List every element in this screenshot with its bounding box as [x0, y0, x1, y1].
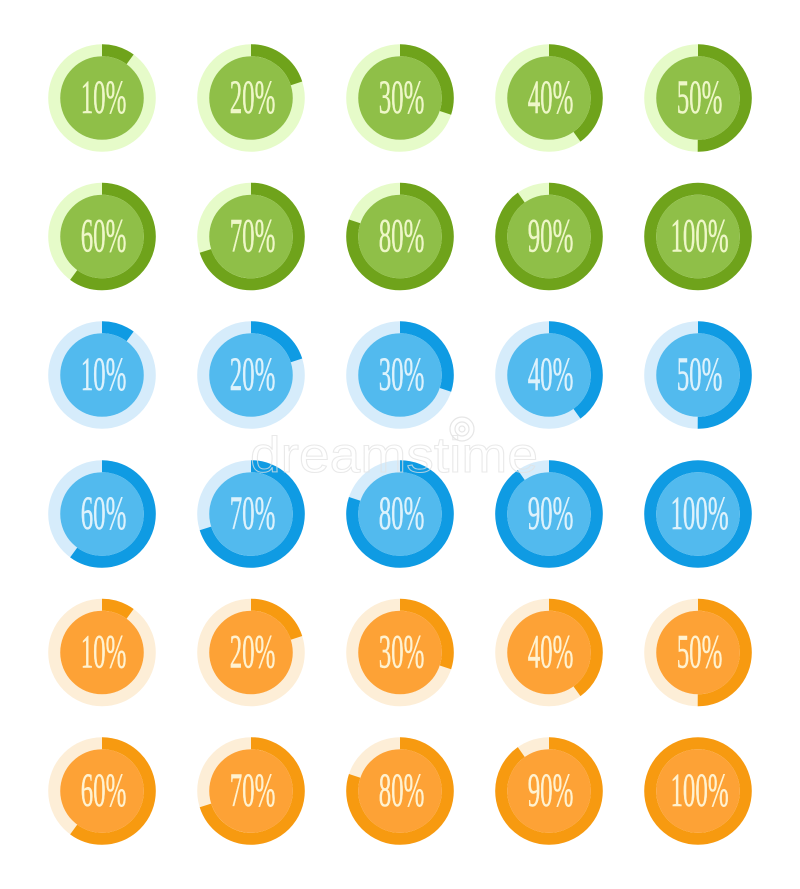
gauge: orange 30%: 30% — [379, 626, 424, 679]
gauge: orange 80%: 80% — [379, 765, 424, 817]
gauge: blue 80%: 80% — [379, 488, 424, 540]
gauge: blue 70%: 70% — [230, 488, 275, 540]
gauge: green 70% — [203, 189, 299, 284]
gauge: orange 10% — [54, 605, 150, 700]
gauge: orange 90% — [501, 743, 597, 839]
gauge: blue 40%: 40% — [528, 349, 573, 401]
gauge: orange 100% — [650, 743, 746, 839]
gauge: orange 70%: 70% — [230, 765, 275, 817]
gauge: green 20%: 20% — [230, 72, 275, 124]
gauge: green 90%: 90% — [528, 210, 573, 263]
gauge: green 60% — [54, 189, 150, 284]
gauge: orange 60%: 60% — [81, 765, 126, 817]
gauge: green 80% — [352, 189, 448, 284]
gauge: orange 20%: 20% — [230, 626, 275, 679]
gauge: blue 80% — [352, 466, 448, 562]
gauge: orange 80% — [352, 743, 448, 839]
gauge: orange 40%: 40% — [528, 626, 573, 679]
gauge: green 60%: 60% — [81, 210, 126, 263]
gauge: green 30% — [352, 50, 448, 146]
gauge: green 50% — [650, 50, 746, 146]
gauge: orange 10%: 10% — [81, 626, 126, 679]
gauge: green 30%: 30% — [379, 72, 424, 124]
gauge: blue 30%: 30% — [379, 349, 424, 401]
gauge: blue 40% — [501, 327, 597, 423]
gauge: blue 10%: 10% — [81, 349, 126, 401]
gauge: orange 70% — [203, 743, 299, 839]
gauge: orange 90%: 90% — [528, 765, 573, 817]
gauge: orange 50% — [650, 605, 746, 700]
gauge: blue 100% — [650, 466, 746, 562]
gauge: green 90% — [501, 189, 597, 284]
gauge: green 100%: 100% — [670, 210, 729, 263]
gauge: orange 100%: 100% — [670, 765, 729, 817]
gauge: blue 90%: 90% — [528, 488, 573, 540]
gauge: blue 90% — [501, 466, 597, 562]
gauge: orange 20% — [203, 605, 299, 700]
gauge: blue 70% — [203, 466, 299, 562]
gauge: blue 50%: 50% — [677, 349, 722, 401]
gauge: green 40%: 40% — [528, 72, 573, 124]
gauge: green 20% — [203, 50, 299, 146]
gauge: green 80%: 80% — [379, 210, 424, 263]
gauge: blue 60%: 60% — [81, 488, 126, 540]
gauge: blue 100%: 100% — [670, 488, 729, 540]
gauge: green 70%: 70% — [230, 210, 275, 263]
gauge: blue 10% — [54, 327, 150, 423]
gauge: orange 50%: 50% — [677, 626, 722, 679]
gauge: orange 40% — [501, 605, 597, 700]
gauge: green 50%: 50% — [677, 72, 722, 124]
gauge: blue 20% — [203, 327, 299, 423]
watermark: dreamstime — [250, 427, 538, 483]
gauge: green 10% — [54, 50, 150, 146]
gauge: blue 60% — [54, 466, 150, 562]
gauge: blue 30% — [352, 327, 448, 423]
gauge: green 100% — [650, 189, 746, 284]
gauge: green 40% — [501, 50, 597, 146]
gauge: orange 30% — [352, 605, 448, 700]
gauge: blue 20%: 20% — [230, 349, 275, 401]
gauge: blue 50% — [650, 327, 746, 423]
gauge: orange 60% — [54, 743, 150, 839]
gauge: green 10%: 10% — [81, 72, 126, 124]
